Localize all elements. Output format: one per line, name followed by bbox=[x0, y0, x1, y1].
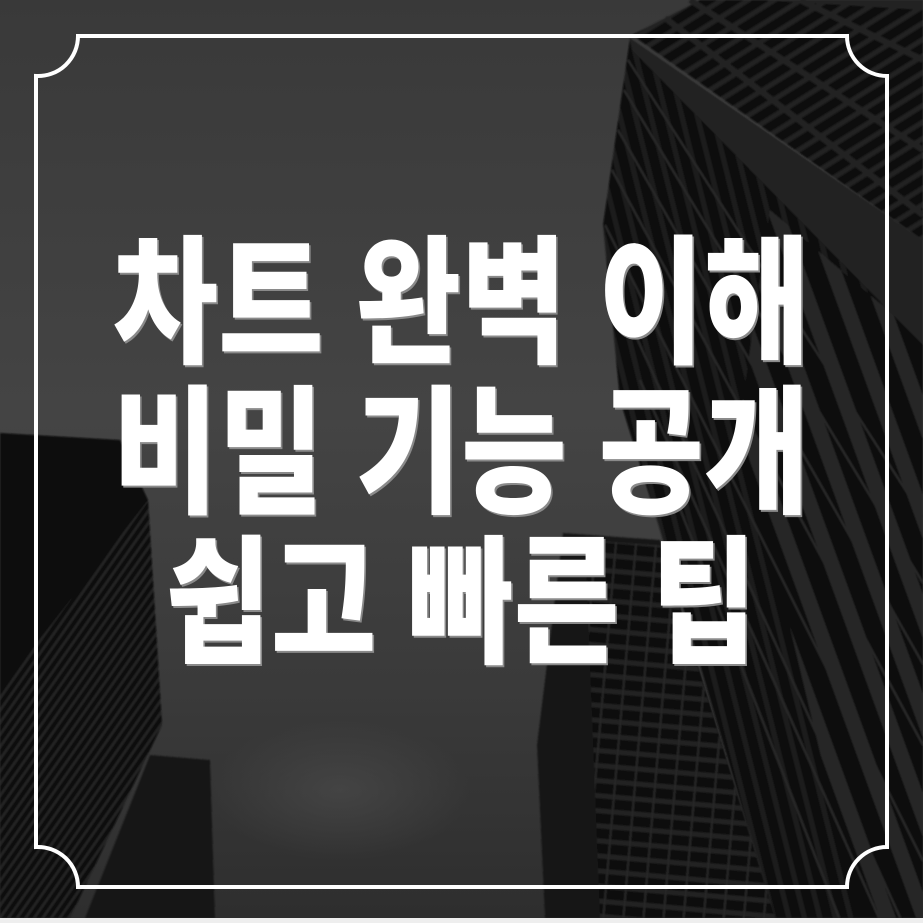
bottom light strip bbox=[0, 918, 923, 923]
right tower: diagonal corner band bbox=[630, 38, 923, 345]
headline line 3: 쉽고 빠른 팁 bbox=[165, 527, 757, 682]
middle tower bbox=[537, 533, 775, 918]
lower left tower bbox=[85, 755, 215, 918]
left tower bbox=[0, 433, 162, 918]
headline line 1: 차트 완벽 이해 bbox=[113, 227, 809, 382]
headline line 2: 비밀 기능 공개 bbox=[113, 377, 809, 532]
right tower: shaded roof facade bbox=[632, 0, 923, 240]
right tower: main facade bbox=[603, 38, 923, 918]
